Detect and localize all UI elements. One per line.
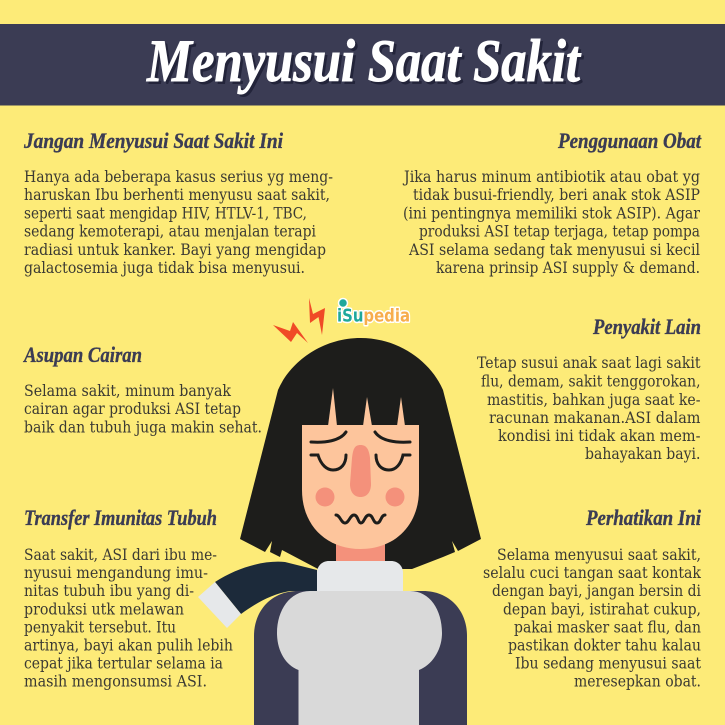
text block: Transfer Imunitas Tubuh: masih mengonsumsi ASI. [24, 673, 207, 691]
text block: Transfer Imunitas Tubuh: artinya, bayi akan pulih lebih [24, 636, 233, 654]
illustration: sick woman [198, 338, 481, 725]
text block: Perhatikan Ini: dengan bayi, jangan bersin di [492, 582, 701, 600]
nose [350, 445, 371, 497]
text block: Perhatikan Ini: Perhatikan Ini [585, 505, 702, 530]
text block: Penyakit Lain: Tetap susui anak saat lagi sakit [477, 354, 701, 372]
text block: Transfer Imunitas Tubuh: penyakit tersebut. Itu [24, 618, 176, 636]
neck [336, 535, 385, 565]
text block: Perhatikan Ini: selalu cuci tangan saat kontak [483, 564, 701, 582]
cuff [198, 582, 241, 628]
text block: Asupan Cairan: Asupan Cairan [22, 342, 142, 367]
title: Menyusui Saat Sakit [149, 30, 584, 96]
text block: Transfer Imunitas Tubuh: nitas tubuh ibu yang di- [24, 582, 194, 600]
text block: Perhatikan Ini: pakai masker saat flu, dan [514, 618, 701, 636]
text block: Perhatikan Ini: pastikan dokter tahu kalau [508, 636, 701, 654]
text block: Perhatikan Ini: Ibu sedang menyusui saat [515, 654, 702, 672]
text block: Penyakit Lain: flu, demam, sakit tenggorokan, [481, 372, 700, 390]
title: Menyusui Saat Sakit [146, 28, 582, 94]
text block: Penyakit Lain: Penyakit Lain [592, 314, 701, 339]
hair [240, 338, 481, 569]
cheeks [316, 488, 404, 506]
logo: iSupedia [337, 298, 410, 326]
text block: Penggunaan Obat: karena prinsip ASI supply & demand. [436, 259, 700, 277]
text block: Penyakit Lain: racunan makanan.ASI dalam [489, 409, 701, 427]
text block: Penggunaan Obat: Jika harus minum antibiotik atau obat yg [402, 168, 700, 186]
collar [317, 561, 403, 591]
text block: Penggunaan Obat: tidak busui-friendly, beri anak stok ASIP [413, 186, 700, 204]
text block: Jangan Menyusui Saat Sakit Ini: galactosemia juga tidak bisa menyusui. [24, 259, 305, 277]
jacket [254, 591, 467, 725]
text block: Penggunaan Obat: Penggunaan Obat [557, 128, 702, 153]
text block: Jangan Menyusui Saat Sakit Ini: seperti saat mengidap HIV, HTLV-1, TBC, [24, 204, 307, 222]
eyebrows and eyes [311, 432, 410, 470]
text block: Asupan Cairan: baik dan tubuh juga makin sehat. [24, 418, 262, 436]
text block: Transfer Imunitas Tubuh: cepat jika tertular selama ia [24, 654, 223, 672]
text block: Asupan Cairan [22, 342, 262, 436]
text block: Transfer Imunitas Tubuh: produksi utk melawan [24, 600, 184, 618]
text block: Jangan Menyusui Saat Sakit Ini: haruskan Ibu berhenti menyusu saat sakit, [24, 186, 330, 204]
text block: Asupan Cairan: Selama sakit, minum banyak [24, 382, 231, 400]
face [302, 425, 419, 549]
text block: Jangan Menyusui Saat Sakit Ini: Jangan Menyusui Saat Sakit Ini [23, 128, 284, 153]
text block: Asupan Cairan: cairan agar produksi ASI tetap [24, 400, 241, 418]
text block: Perhatikan Ini: Selama menyusui saat sakit, [497, 546, 701, 564]
text block: Jangan Menyusui Saat Sakit Ini [23, 128, 333, 277]
text block: Perhatikan Ini [483, 505, 702, 691]
text block: Transfer Imunitas Tubuh [24, 505, 233, 691]
text block: Penggunaan Obat: (ini pentingnya memiliki stok ASIP). Agar [403, 204, 700, 222]
text block: Penggunaan Obat [402, 128, 702, 277]
text block: Penggunaan Obat: ASI selama sedang tak menyusui si kecil [408, 241, 700, 259]
mouth [336, 515, 385, 523]
scarf arm [215, 562, 317, 614]
title banner [0, 24, 725, 106]
text block: Perhatikan Ini: depan bayi, istirahat cukup, [503, 600, 701, 618]
text block: Penyakit Lain [477, 314, 701, 463]
logo: iSupedia: iSupedia [337, 306, 410, 326]
shirt [277, 591, 442, 725]
text block: Jangan Menyusui Saat Sakit Ini: sedang kemoterapi, atau menjalan terapi [24, 222, 316, 240]
text block: Transfer Imunitas Tubuh: nyusui mengandung imu- [24, 564, 208, 582]
text block: Transfer Imunitas Tubuh: Transfer Imunitas Tubuh [24, 505, 217, 530]
text block: Jangan Menyusui Saat Sakit Ini: Hanya ada beberapa kasus serius yg meng- [24, 168, 333, 186]
text block: Transfer Imunitas Tubuh: Saat sakit, ASI dari ibu me- [24, 546, 217, 564]
text block: Penyakit Lain: kondisi ini tidak akan mem- [498, 427, 700, 445]
text block: Perhatikan Ini: meresepkan obat. [574, 673, 701, 691]
hair fringe gaps [328, 388, 405, 426]
text block: Penyakit Lain: bahayakan bayi. [585, 445, 700, 463]
text block: Penyakit Lain: mastitis, bahkan juga saat ke- [487, 391, 700, 409]
text block: Jangan Menyusui Saat Sakit Ini: radiasi untuk kanker. Bayi yang mengidap [24, 241, 326, 259]
icon: pain lightning bolts [273, 298, 325, 343]
